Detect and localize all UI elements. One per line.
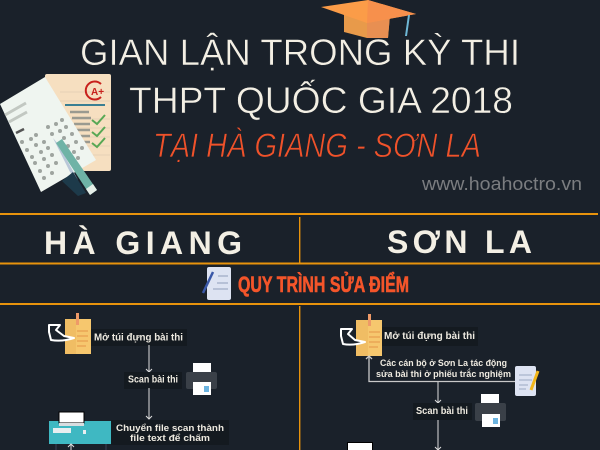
step: convert file: Chuyển file scan thành — [116, 423, 224, 434]
arrow — [435, 420, 441, 450]
heading: Hà Giang: HÀ GIANG — [44, 225, 242, 261]
section heading: QUY TRÌNH SỬA ĐIỂM — [238, 272, 409, 297]
icon: envelope and cursor — [341, 314, 382, 356]
icon: printer — [475, 394, 506, 427]
icon: graduation cap — [321, 0, 416, 38]
icon: note and pencil — [515, 366, 538, 396]
arrow — [146, 345, 152, 372]
title — [80, 32, 520, 121]
step: officials alter answers: Các cán bộ ở Sơn La tác động — [380, 358, 507, 368]
step: scan — [124, 372, 182, 389]
panel: Son La flow — [341, 314, 538, 450]
subtitle: TẠI HÀ GIANG - SƠN LA — [153, 127, 481, 165]
step: open bag — [91, 329, 187, 346]
step: open bag — [382, 327, 478, 346]
panel: Ha Giang flow — [49, 313, 229, 450]
step: officials alter answers — [376, 358, 511, 379]
icon: envelope and cursor — [49, 313, 91, 354]
step: officials alter answers: sửa bài thi ở phiếu trắc nghiệm — [376, 368, 511, 379]
arrow — [435, 382, 441, 403]
dividers — [0, 214, 600, 450]
arrow: feedback to bag — [366, 356, 516, 382]
heading: Sơn La: SƠN LA — [387, 224, 532, 260]
icon: exam papers and pen — [0, 74, 111, 196]
icon: document with pen — [203, 267, 231, 300]
arrow — [146, 388, 152, 419]
icon: desk with computer — [49, 412, 111, 450]
step: open bag: Mở túi đựng bài thi — [94, 332, 183, 344]
icon: A+ grade: A+ — [91, 87, 104, 98]
title: GIAN LẬN TRONG KỲ THI — [80, 32, 520, 73]
step: convert file — [111, 420, 229, 445]
title: THPT QUỐC GIA 2018 — [129, 79, 513, 121]
website: www.hoahoctro.vn — [421, 174, 582, 194]
step: scan — [413, 403, 472, 420]
icon: monitor — [348, 442, 372, 450]
step: scan: Scan bài thi — [416, 406, 468, 417]
step: scan: Scan bài thi — [128, 374, 178, 386]
step: open bag: Mở túi đựng bài thi — [384, 331, 475, 342]
step: convert file: file text để chấm — [130, 433, 210, 444]
icon: printer — [186, 363, 217, 395]
arrow — [68, 444, 74, 450]
